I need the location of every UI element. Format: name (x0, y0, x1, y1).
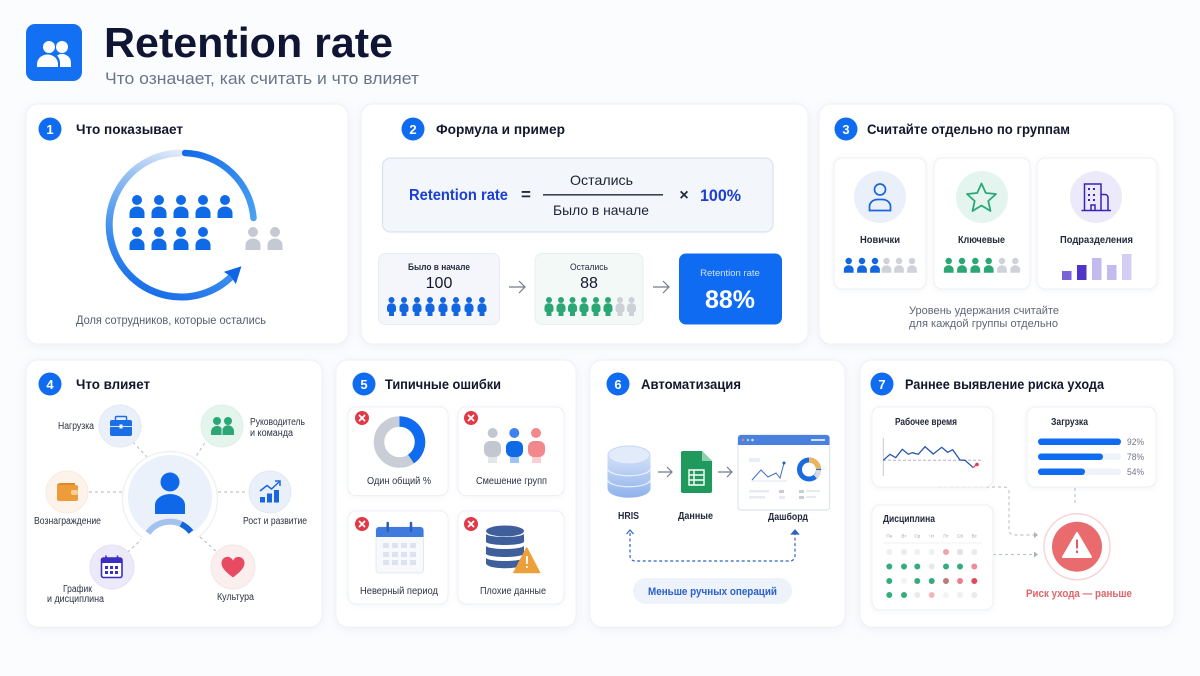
badge 3: 3 (842, 122, 850, 137)
formula box: Остались (570, 172, 633, 188)
caption 1: Доля сотрудников, которые остались (76, 315, 266, 327)
discipline heatmap: Чт (929, 534, 934, 538)
badge 6 (606, 372, 630, 396)
factor: manager and team (201, 405, 305, 447)
group: key staff: Ключевые (958, 235, 1005, 246)
heading 7: Раннее выявление риска ухода (905, 376, 1104, 392)
factor: culture: Культура (217, 592, 254, 603)
mistake: wrong period: Неверный период (360, 586, 438, 597)
discipline heatmap: Дисциплина (883, 514, 935, 525)
badge 7: 7 (878, 377, 886, 392)
factor: growth (243, 471, 307, 527)
mistake: mixed groups (458, 407, 564, 496)
factor: compensation: Вознаграждение (34, 516, 101, 527)
example: start: Было в начале (408, 262, 470, 273)
central employee (122, 452, 218, 550)
heading 1: Что показывает (76, 121, 183, 137)
factor: workload: Нагрузка (58, 421, 94, 432)
mistake: single percent (348, 407, 448, 496)
caption 3: для каждой группы отдельно (909, 318, 1058, 330)
badge 2: 2 (409, 122, 417, 137)
workload bars: Загрузка (1051, 417, 1088, 428)
example: start (378, 254, 500, 324)
discipline heatmap: Пн (886, 534, 893, 538)
arrow (509, 281, 525, 293)
working time chart (872, 407, 993, 487)
factor: compensation (34, 471, 101, 527)
group: key staff (934, 158, 1030, 289)
HRIS database (608, 446, 650, 522)
panel 3: by groups (819, 104, 1174, 344)
discipline heatmap: Вт (902, 534, 906, 538)
workload bars (1027, 407, 1156, 487)
risk alert (1026, 514, 1132, 600)
factor: schedule and discipline: и дисциплина (47, 594, 104, 605)
mistake: bad data: Плохие данные (480, 586, 546, 597)
mistake: mixed groups: Смешение групп (476, 476, 547, 487)
panel 7: early risk detection (860, 360, 1174, 627)
discipline heatmap: Вс (972, 534, 978, 538)
example: stayed (535, 254, 643, 324)
caption 3 (909, 305, 1059, 330)
example: stayed: 88 (580, 275, 598, 292)
pill (633, 578, 792, 604)
retention ring with arrow (109, 153, 254, 297)
heading 3: Считайте отдельно по группам (867, 121, 1070, 137)
working time chart: Рабочее время (895, 416, 957, 428)
people: stayed (130, 195, 232, 250)
example: start: 100 (426, 275, 452, 292)
mistake: bad data (458, 511, 564, 604)
title: Retention rate (104, 19, 393, 66)
group: newcomers (834, 158, 926, 289)
factor: growth: Рост и развитие (243, 516, 307, 527)
connectors to risk (938, 487, 1075, 558)
badge 5 (352, 372, 376, 396)
badge 4: 4 (46, 377, 54, 392)
badge 7 (870, 372, 894, 396)
group: newcomers: Новички (860, 235, 900, 246)
badge 2 (402, 118, 424, 140)
discipline heatmap: Ср (914, 534, 921, 538)
workload bars: 92% (1127, 437, 1144, 447)
formula box: Retention rate (409, 187, 508, 204)
formula box: Было в начале (553, 202, 649, 218)
formula box (382, 158, 773, 232)
formula box: 100% (700, 186, 741, 205)
discipline heatmap: Сб (957, 534, 963, 538)
group: departments (1037, 158, 1157, 289)
result box: Retention rate (700, 268, 760, 279)
factor: culture (211, 545, 255, 603)
factor: schedule and discipline (47, 545, 134, 605)
connectors (89, 438, 248, 552)
people: left (246, 227, 282, 250)
HRIS database: HRIS (618, 511, 639, 522)
badge 4 (38, 372, 62, 396)
group: departments: Подразделения (1060, 235, 1133, 246)
badge 5: 5 (360, 377, 368, 392)
pill: Меньше ручных операций (648, 586, 777, 598)
formula box: = (521, 185, 531, 204)
risk alert: Риск ухода — раньше (1026, 588, 1132, 600)
arrow (653, 281, 669, 293)
header icon: people (26, 24, 82, 81)
badge 1: 1 (46, 122, 54, 137)
arrow (658, 467, 672, 477)
factor: workload (58, 405, 141, 447)
result box (679, 254, 782, 324)
subtitle: Что означает, как считать и что влияет (105, 69, 419, 88)
feedback dashed arrow (626, 530, 798, 561)
result box: 88% (705, 286, 755, 314)
panel 4: factors (26, 360, 322, 627)
discipline heatmap (872, 505, 993, 610)
factor: schedule and discipline: График (63, 583, 93, 595)
panel 6: automation (590, 360, 845, 627)
heading 2: Формула и пример (436, 121, 565, 137)
factor: manager and team: и команда (250, 428, 293, 439)
badge 6: 6 (614, 377, 622, 392)
heading 4: Что влияет (76, 376, 150, 392)
panel 5: typical mistakes (336, 360, 576, 627)
example: stayed: Остались (570, 262, 608, 273)
panel 1: what it shows (26, 104, 348, 344)
discipline heatmap: Пт (943, 534, 949, 538)
factor: manager and team: Руководитель (250, 417, 305, 428)
panel 2: formula and example (361, 104, 808, 344)
arrow (718, 467, 732, 477)
mistake: single percent: Один общий % (367, 475, 431, 487)
heading 6: Автоматизация (641, 376, 741, 392)
badge 1 (38, 118, 62, 140)
workload bars: 78% (1127, 452, 1144, 462)
dashboard: Дашборд (768, 511, 809, 523)
data sheet: Данные (678, 511, 713, 522)
workload bars: 54% (1127, 467, 1144, 477)
dashboard (738, 435, 830, 523)
formula box: × (679, 187, 689, 204)
mistake: wrong period (348, 511, 448, 604)
data sheet (678, 451, 713, 522)
badge 3 (834, 118, 858, 140)
heading 5: Типичные ошибки (385, 376, 501, 392)
caption 3: Уровень удержания считайте (909, 305, 1059, 317)
